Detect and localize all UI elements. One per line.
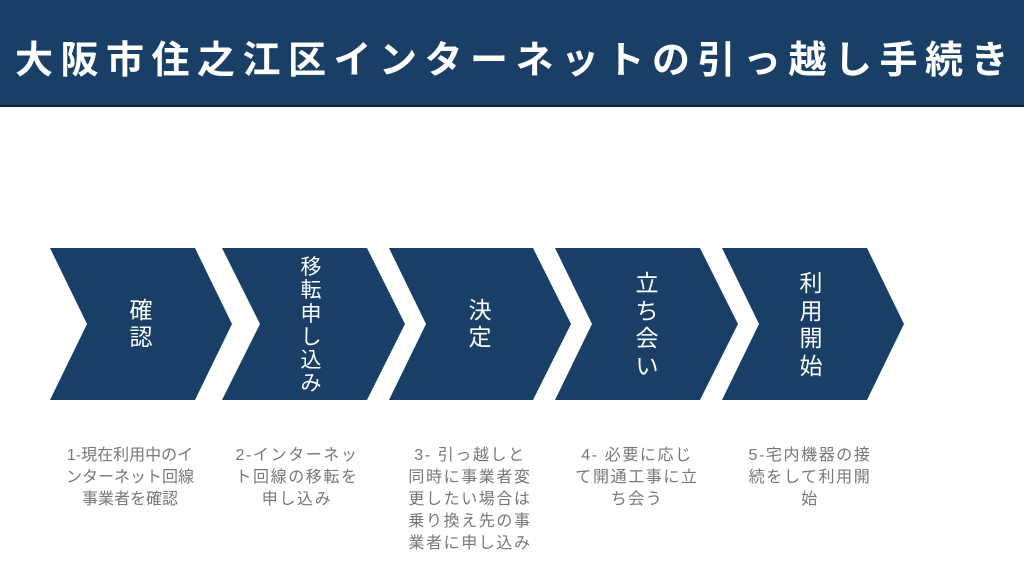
label: 移転申し込み: し <box>300 326 322 349</box>
description 3: 同時に事業者変 <box>408 469 532 486</box>
label: 移転申し込み: 移 <box>300 256 322 279</box>
description 1: 1-現在利用中のイ <box>67 447 193 464</box>
description 3: 業者に申し込み <box>408 535 532 552</box>
label: 移転申し込み: み <box>300 372 322 395</box>
description 5: 続をして利用開 <box>749 469 871 486</box>
label: 立ち会い: ち <box>636 298 658 324</box>
label: 決定: 定 <box>468 324 492 350</box>
label: 移転申し込み: 転 <box>300 279 322 302</box>
label: 確認 <box>130 297 152 350</box>
label: 利用開始: 開 <box>800 325 822 351</box>
description 5: 始 <box>801 491 819 508</box>
description 4 <box>575 446 699 508</box>
label: 決定 <box>468 297 492 350</box>
chevron 3 <box>389 248 571 400</box>
label: 立ち会い: 立 <box>636 270 658 296</box>
label: 利用開始: 始 <box>800 352 822 378</box>
label: 立ち会い <box>636 270 658 378</box>
description 5 <box>748 446 872 508</box>
chevron 4 <box>555 248 738 400</box>
description 3: 乗り換え先の事 <box>408 513 532 530</box>
label: 確認: 確 <box>130 297 152 323</box>
description 1: 事業者を確認 <box>82 491 178 508</box>
label: 確認: 認 <box>130 324 152 350</box>
label: 立ち会い: 会 <box>636 325 658 351</box>
description 2: ト回線の移転を <box>235 469 359 486</box>
description 4: 4- 必要に応じ <box>581 447 693 464</box>
description 1: ンターネット回線 <box>66 469 194 486</box>
label: 決定: 決 <box>468 297 492 323</box>
description 3 <box>408 446 532 552</box>
label: 移転申し込み: 申 <box>300 303 322 326</box>
label: 利用開始: 利 <box>800 270 822 296</box>
description 2 <box>235 446 359 508</box>
description 3: 更したい場合は <box>408 491 532 508</box>
chevron 5 <box>722 248 904 400</box>
description 3: 3- 引っ越しと <box>414 447 526 464</box>
chevron 1 <box>50 248 232 400</box>
label: 利用開始: 用 <box>800 298 822 324</box>
label: 移転申し込み <box>300 256 322 395</box>
label: 立ち会い: い <box>636 352 658 378</box>
header band <box>0 0 1024 107</box>
description 2: 2-インターネッ <box>235 447 359 464</box>
label: 利用開始 <box>800 270 822 378</box>
chevron 2 <box>222 248 405 400</box>
description 1 <box>66 446 194 508</box>
description 4: ち会う <box>611 491 663 508</box>
title: 大阪市住之江区インターネットの引っ越し手続き <box>15 40 1016 82</box>
description 5: 5-宅内機器の接 <box>748 447 872 464</box>
label: 移転申し込み: 込 <box>300 349 322 372</box>
description 4: て開通工事に立 <box>575 469 699 486</box>
description 2: 申し込み <box>262 491 332 508</box>
